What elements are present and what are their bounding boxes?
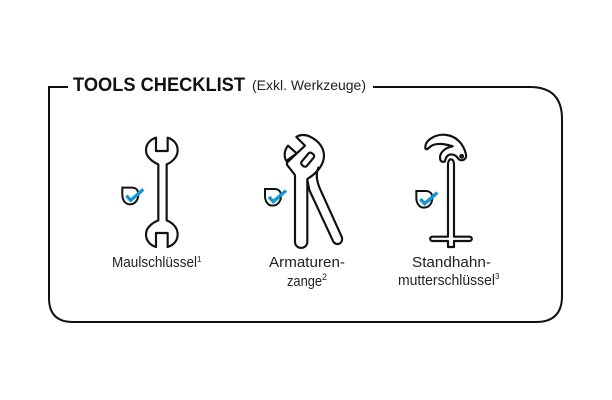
label: Armaturenzange: zange [287, 273, 322, 290]
icon: check badge 1 [122, 188, 143, 204]
label: Standhahnmutterschlüssel: Standhahn- [412, 254, 491, 271]
icon: check badge 2 [265, 189, 286, 206]
icon: standpipe nut wrench [425, 135, 472, 247]
label: Standhahnmutterschlüssel: 3 [495, 272, 500, 281]
panel frame [49, 87, 562, 322]
label: Armaturenzange: Armaturen- [269, 254, 345, 271]
icon: check badge 3 [416, 191, 437, 208]
label: Standhahnmutterschlüssel: mutterschlüssel [398, 272, 495, 289]
subtitle: (Exkl. Werkzeuge) [252, 77, 366, 93]
icon: open-end wrench [146, 138, 178, 247]
label: Standhahnmutterschlüssel [398, 254, 500, 289]
label: Maulschlüssel: Maulschlüssel [112, 254, 197, 271]
icon: water pump pliers [285, 135, 342, 248]
label: Armaturenzange: 2 [322, 272, 327, 282]
title: TOOLS CHECKLIST [73, 75, 245, 96]
footnote mark 1: 1 [197, 255, 202, 264]
label: Armaturenzange [269, 254, 345, 290]
